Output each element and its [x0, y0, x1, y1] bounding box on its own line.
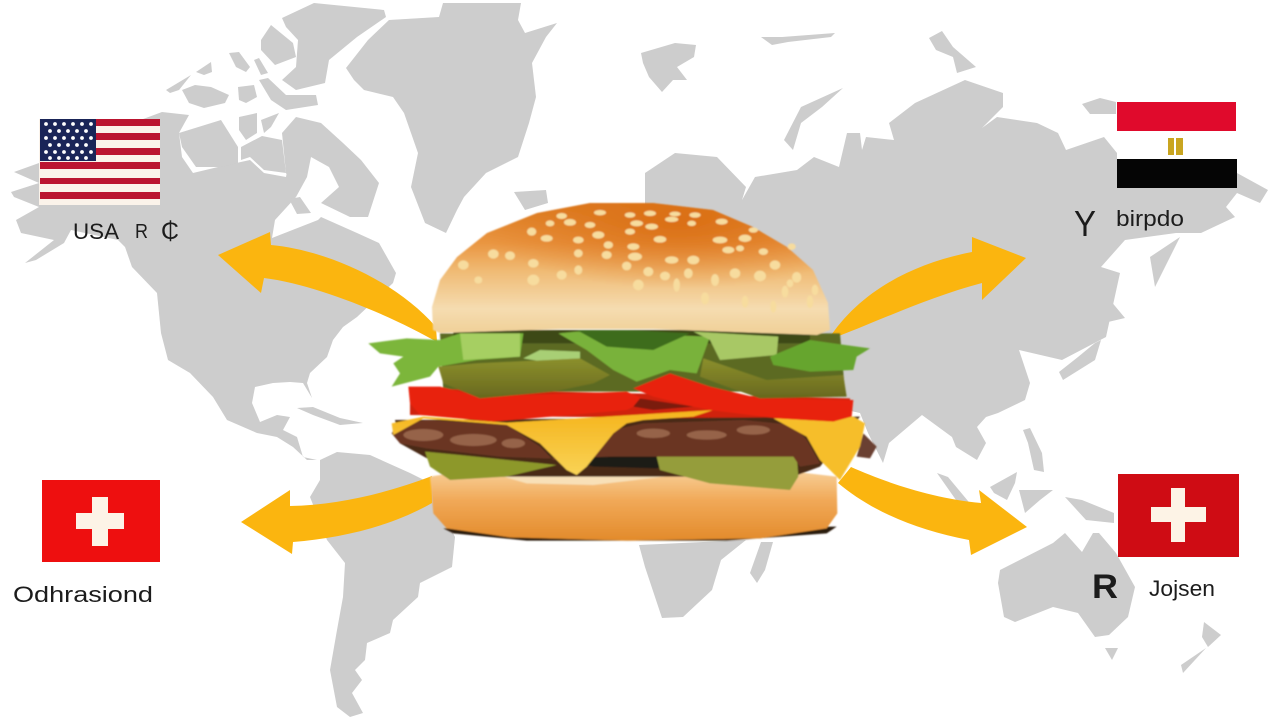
- burger: light lettuce left: [460, 333, 520, 360]
- burger: patty backing: [395, 417, 860, 477]
- burger: bottom bun shadow: [443, 527, 837, 541]
- burger: light lettuce strip: [523, 350, 580, 361]
- map: Tasmania: [1105, 648, 1118, 660]
- map: Arctic islands: [166, 3, 386, 217]
- burger: green backing: [440, 333, 845, 392]
- arrow: top right: [828, 237, 1026, 340]
- map: Madagascar: [750, 542, 773, 583]
- stars: [44, 122, 93, 160]
- burger: light right pickle: [693, 332, 778, 360]
- map: Iceland: [514, 190, 548, 210]
- label: USA: USA: [73, 219, 119, 244]
- label: USA: R: [135, 221, 148, 243]
- map: Cuba: [297, 407, 363, 425]
- map: Novaya islands: [929, 31, 976, 73]
- burger: dark band under bun: [453, 330, 810, 343]
- burger: patty texture: [403, 425, 770, 448]
- flag: bottom-left cross flag: [42, 480, 160, 562]
- flag: USA: [39, 119, 160, 205]
- burger: top bun: [432, 203, 830, 335]
- burger: left tomato: [408, 387, 647, 422]
- map: Franz Josef islands: [761, 33, 835, 45]
- burger: upper left pickle: [438, 358, 610, 398]
- label: bottom-right icon: R: [1092, 568, 1118, 606]
- flag: bottom-right cross flag: [1118, 474, 1239, 557]
- arrow: bottom right: [838, 467, 1027, 555]
- label: USA: [73, 218, 179, 245]
- map: New Zealand: [1181, 622, 1221, 673]
- map: Svalbard: [641, 43, 696, 92]
- flag: Egypt: [1117, 102, 1237, 188]
- burger: patty right edge: [857, 433, 877, 458]
- burger: center lettuce: [558, 332, 710, 382]
- map: northern island arc: [784, 88, 843, 150]
- burger: sesame seeds: [458, 210, 818, 313]
- label: bottom-right: Jojsen: [1149, 576, 1215, 601]
- map: Southeast Asia islands: [937, 428, 1114, 523]
- map: Sakhalin: [1150, 237, 1180, 287]
- burger: right tomato: [633, 373, 853, 422]
- label: USA: ₵: [161, 218, 179, 245]
- burger: [368, 203, 877, 541]
- burger: left lettuce: [368, 333, 523, 387]
- burger: right lettuce: [770, 340, 870, 372]
- burger: bun cream top: [503, 467, 693, 485]
- burger: tomato backing: [410, 388, 851, 420]
- burger: lower layers: [368, 330, 877, 541]
- burger: lower left pickle: [425, 452, 557, 480]
- burger: dark center lettuce: [577, 330, 690, 350]
- burger: cheese slice: [392, 410, 713, 475]
- burger: bottom bun: [430, 467, 837, 541]
- arrow: bottom left: [241, 476, 432, 554]
- burger: upper right pickle: [700, 358, 847, 398]
- map: small eastern island: [1082, 98, 1116, 114]
- label: Egypt icon: Y: [1074, 203, 1096, 244]
- map: North and Central America: [11, 112, 396, 460]
- burger: cheese right corner: [773, 417, 865, 480]
- burger: beef patty: [392, 420, 820, 467]
- arrow: top left: [218, 232, 437, 342]
- burger: lower right pickle: [657, 452, 798, 490]
- burger: dark shadow: [547, 453, 693, 468]
- label: bottom-left: Odhrasiond: [13, 582, 153, 607]
- map: South America: [310, 452, 455, 717]
- map: Greenland: [346, 3, 557, 233]
- map: Australia: [998, 533, 1135, 637]
- burger: top bun glow: [432, 203, 830, 335]
- burger: tomato shadow: [633, 398, 693, 410]
- label: Egypt: birpdo: [1116, 206, 1184, 231]
- map: Eurasia: [645, 80, 1268, 463]
- map: Japan: [1059, 270, 1125, 380]
- map: Africa: [639, 540, 746, 618]
